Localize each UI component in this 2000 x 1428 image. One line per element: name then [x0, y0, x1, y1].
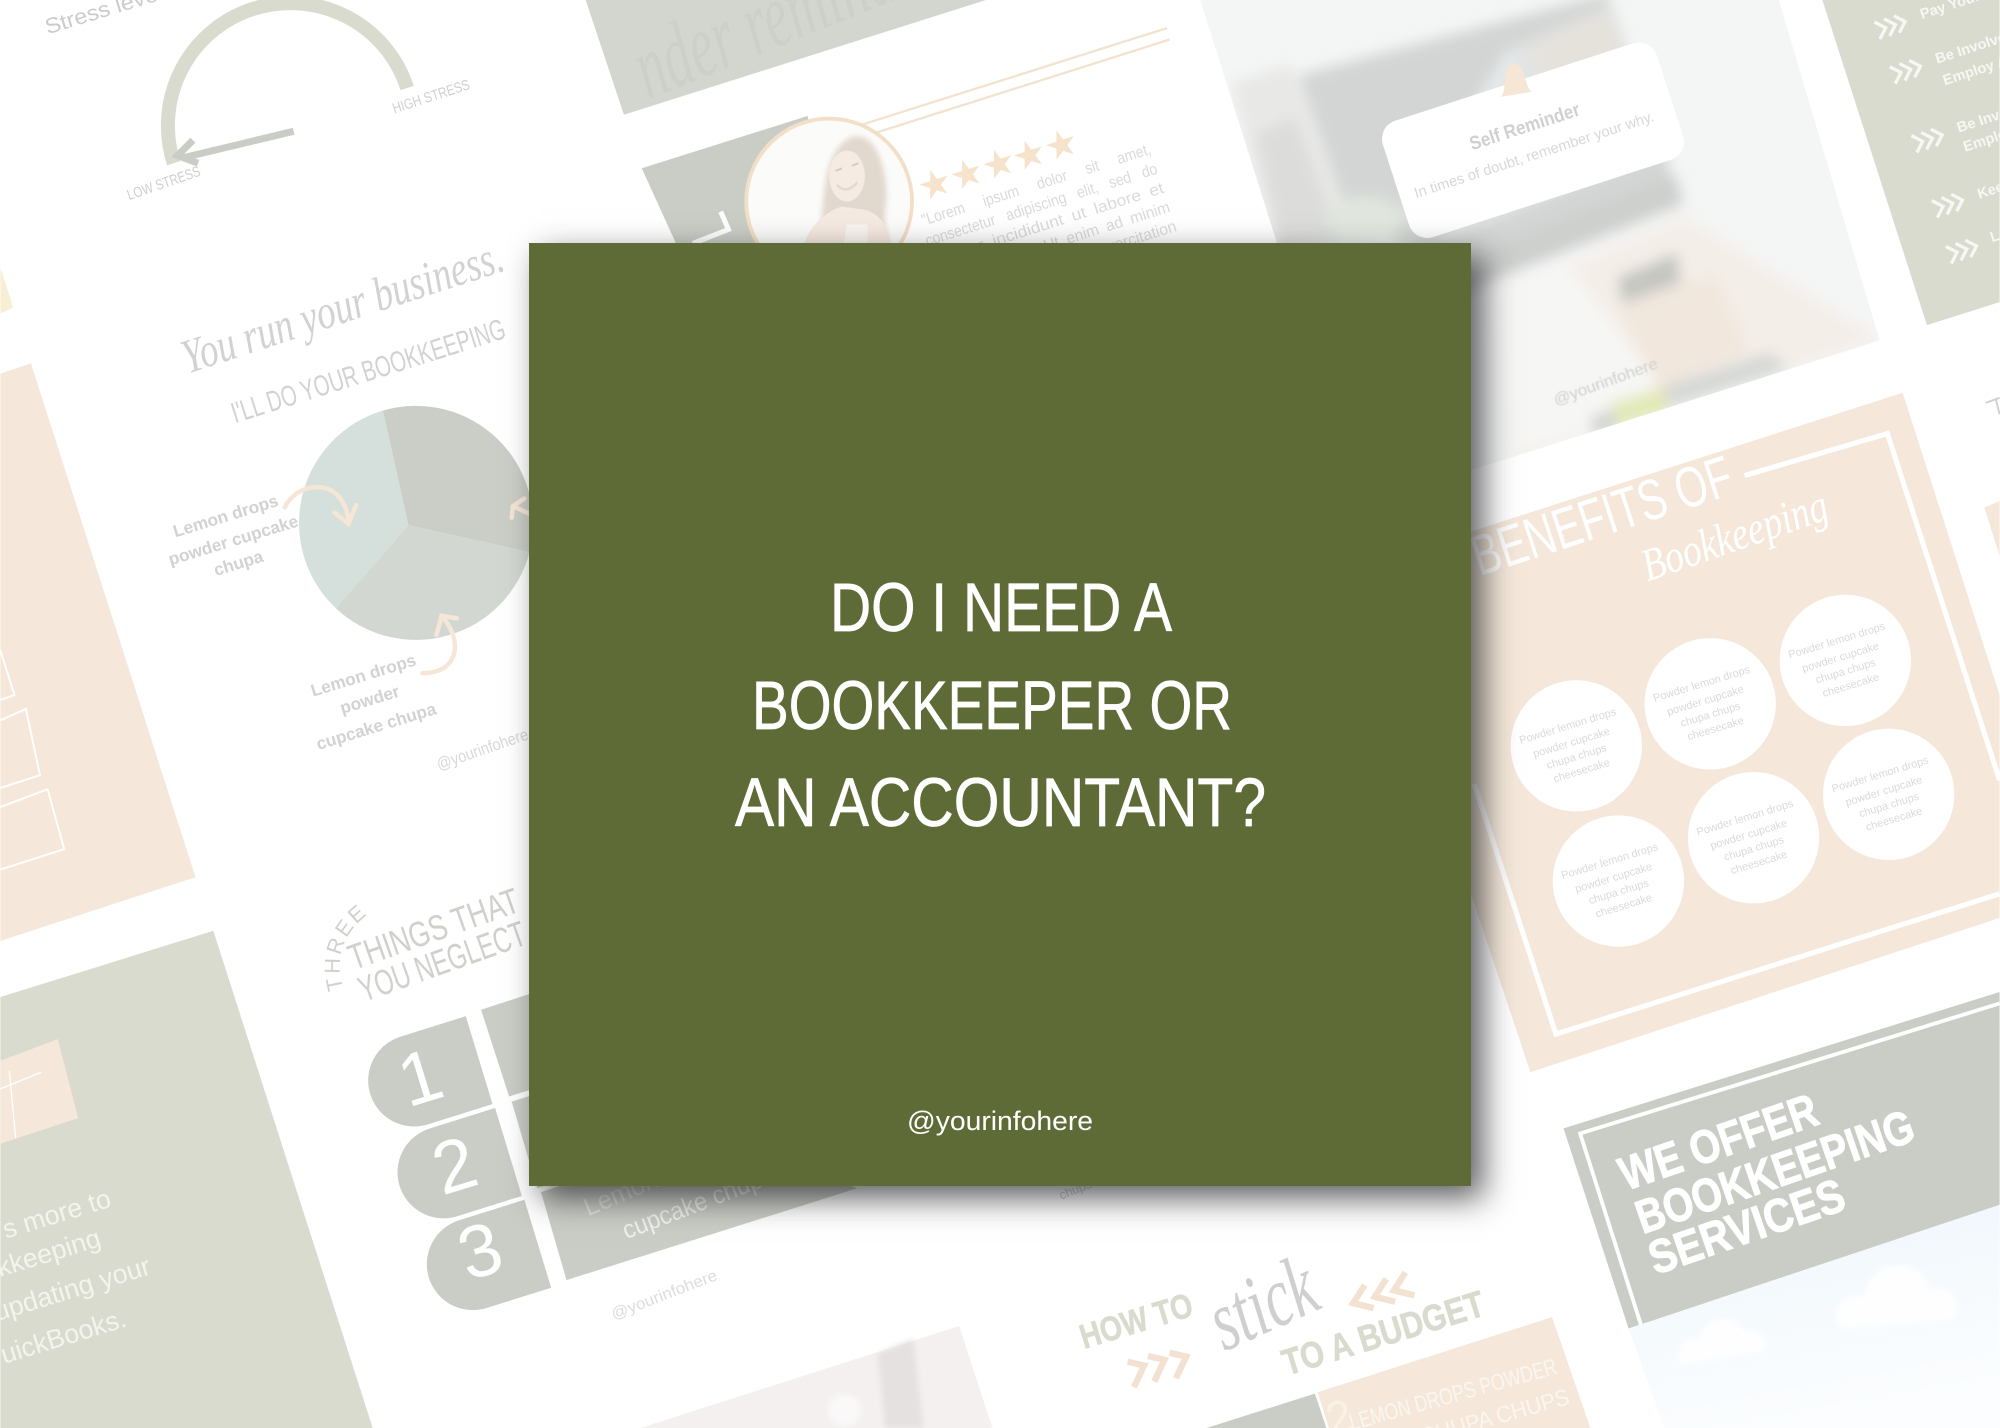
- testimonial text: tempor incididunt ut labore et: [930, 180, 1167, 269]
- label: high stress: HIGH STRESS: [391, 77, 472, 117]
- left grey object: [1236, 69, 1334, 198]
- pie chart: [299, 406, 533, 640]
- circle 6: cheesecake: [1864, 805, 1924, 834]
- card title: Self Reminder: [1467, 99, 1583, 155]
- keyboard: [1506, 274, 1651, 445]
- circle 5: powder cupcake: [1709, 817, 1789, 852]
- circle 5: cheesecake: [1729, 849, 1789, 877]
- heading: BOOKKEEPING: [1629, 1099, 1921, 1244]
- panel: peach template left: [0, 363, 195, 941]
- title: BOOKKEEPER OR: [752, 667, 1232, 744]
- portrait: [744, 116, 914, 243]
- label: left pie callout: Lemon drops: [171, 490, 281, 541]
- small text peeking below green card: chups: [1057, 1176, 1094, 1203]
- panel: stress gauge: [42, 0, 472, 204]
- circle 2: cheesecake: [1686, 715, 1745, 743]
- main green card: [529, 243, 1471, 1186]
- handle: @yourinfohere: [609, 1267, 720, 1323]
- banner: [586, 0, 986, 115]
- title: AN ACCOUNTANT?: [735, 764, 1266, 841]
- circle 5: Powder lemon drops: [1695, 798, 1795, 839]
- panel: you run your business: [166, 230, 533, 774]
- circle 3: chupa chups: [1814, 657, 1878, 686]
- content boxes: [1207, 1394, 1326, 1428]
- circle 1: chupa chups: [1545, 742, 1609, 772]
- quote text: s more to: [0, 1183, 114, 1245]
- stars: ★: [944, 149, 990, 200]
- panel: three things: [324, 881, 857, 1323]
- panel: we offer bookkeeping services: [1564, 992, 2000, 1428]
- handle: @yourinfohere: [434, 725, 531, 774]
- label: left pie callout: chupa: [211, 546, 266, 580]
- circle 6: Powder lemon drops: [1830, 754, 1930, 795]
- testimonial text: [920, 141, 1179, 307]
- arrow: bottom curved: [422, 616, 457, 673]
- testimonial text: consectetur adipiscing elit, sed do: [923, 161, 1160, 250]
- script heading: stick: [1193, 1237, 1332, 1369]
- icon: right chevrons: [1128, 1353, 1186, 1387]
- curved word three: [340, 912, 371, 989]
- stars: [912, 119, 1084, 210]
- circle 1: Powder lemon drops: [1518, 706, 1618, 747]
- panel: how to stick to a budget: [1075, 1237, 1590, 1428]
- sky photo: [1629, 1205, 2000, 1428]
- circle 4: chupa chups: [1587, 877, 1651, 907]
- circle 1: cheesecake: [1552, 757, 1612, 785]
- heading: how to: HOW TO: [1075, 1286, 1197, 1357]
- white frame: [1474, 434, 2000, 1034]
- desk: [1501, 217, 1880, 459]
- testimonial text: veniam, quis nostrud exercitation: [943, 218, 1179, 307]
- heading: BENEFITS OF: [1464, 444, 1740, 589]
- monitor body: [1298, 0, 1677, 274]
- panel: blurred desk photo: [1200, 0, 1880, 470]
- panel: three things: 1: [388, 1032, 452, 1123]
- circle 2: chupa chups: [1679, 700, 1743, 730]
- gauge needle arrow: [178, 131, 294, 163]
- label: bottom pie callout: Lemon drops: [308, 650, 418, 701]
- testimonial text: dolore magna. Ut enim ad minim: [936, 199, 1172, 288]
- panel: right edge slivers: [1984, 398, 2000, 556]
- panel: three things: THREE: [324, 904, 366, 992]
- title: DO I NEED A: [830, 569, 1172, 646]
- heading: [1612, 1083, 1921, 1284]
- circle 5: chupa chups: [1722, 834, 1786, 864]
- checklist text: [1918, 0, 2000, 246]
- plant: [1326, 196, 1403, 242]
- icon: chevrons: [1874, 13, 1979, 263]
- circle 3: powder cupcake: [1801, 640, 1881, 675]
- panel: testimonial: [586, 0, 1176, 243]
- circle 4: Powder lemon drops: [1560, 841, 1660, 882]
- text rows: [481, 950, 689, 1096]
- monitor light screen area: [1448, 45, 1542, 235]
- circle 2: powder cupcake: [1666, 684, 1745, 718]
- panel: three things: Lemon drops: [580, 1138, 728, 1222]
- stars: ★: [1038, 119, 1084, 171]
- label: bottom pie callout: powder: [337, 681, 402, 718]
- title: [735, 569, 1266, 841]
- circle 3: Powder lemon drops: [1787, 620, 1887, 661]
- testimonial text: "Lorem ipsum dolor sit amet,: [920, 141, 1153, 229]
- arrow: left curved: [285, 487, 356, 524]
- dark plant pot: [1617, 252, 1681, 303]
- label: left pie callout: [166, 490, 301, 580]
- script heading: You run your business.: [175, 230, 510, 384]
- label: bottom pie callout: cupcake chupa: [314, 698, 439, 754]
- circle 6: [1823, 729, 1954, 860]
- numbered pills: [368, 1016, 493, 1127]
- heading: WE OFFER: [1612, 1083, 1825, 1200]
- icon: bell: [1501, 64, 1532, 97]
- panel: three things: YOU NEGLECT: [353, 914, 531, 1010]
- handle: @yourinfohere: [1551, 356, 1660, 409]
- yellow note: [1611, 388, 1669, 428]
- circle 5: [1688, 772, 1819, 903]
- gauge arc: [168, 3, 407, 163]
- gray square: [642, 116, 842, 255]
- circle 2: Powder lemon drops: [1652, 664, 1752, 705]
- circle 4: cheesecake: [1594, 892, 1654, 920]
- stars: ★: [976, 138, 1022, 190]
- card text: In times of doubt, remember your why.: [1412, 109, 1656, 202]
- monitor lower bezel: [1471, 180, 1686, 290]
- circle 2: [1645, 638, 1776, 769]
- circle 1: powder cupcake: [1532, 726, 1611, 760]
- stars: ★: [1006, 129, 1052, 181]
- script heading: Bookkeeping: [1634, 480, 1834, 591]
- quote text: [0, 1183, 154, 1370]
- heading: bookkeeping: I'LL DO YOUR BOOKKEEPING: [227, 313, 509, 430]
- icon: large cloud: [1836, 1265, 1956, 1329]
- heading: THINGS THAT: [343, 881, 525, 978]
- label: left pie callout: powder cupcake: [166, 511, 301, 569]
- circle 4: [1553, 815, 1684, 947]
- heading: to a budget: TO A BUDGET: [1277, 1283, 1490, 1383]
- arrow: right: [512, 499, 532, 518]
- panel: three things: 3: [448, 1205, 512, 1296]
- circle 1: [1511, 680, 1642, 812]
- label: low stress: LOW STRESS: [125, 164, 203, 204]
- notification card: [1377, 38, 1689, 243]
- circle 4: powder cupcake: [1574, 861, 1654, 896]
- panel: sage checklist top right: [1822, 0, 2000, 325]
- circle 6: chupa chups: [1858, 791, 1921, 820]
- quote text: uickBooks.: [0, 1303, 130, 1370]
- peach lines: [861, 28, 1170, 133]
- icon: left chevrons: [1353, 1272, 1414, 1308]
- panel: blurred notebook photo bottom: [640, 1326, 992, 1428]
- icon: small cloud: [1679, 1319, 1765, 1364]
- circle 3: cheesecake: [1821, 671, 1881, 700]
- stars: ★: [912, 159, 958, 210]
- panel: three things: cupcake chupa: [619, 1161, 779, 1245]
- handle: @yourinfohere: [907, 1106, 1093, 1136]
- circle 6: powder cupcake: [1844, 774, 1924, 809]
- panel: yellow sliver: [0, 268, 13, 314]
- grey block: [1662, 352, 1788, 408]
- panel: sage quote bottom left: [0, 931, 373, 1428]
- panel: three things: 2: [423, 1119, 486, 1211]
- heading: SERVICES: [1641, 1168, 1851, 1284]
- peach tag: [0, 1039, 78, 1144]
- circle 3: [1780, 595, 1911, 726]
- panel: benefits of bookkeeping: [1464, 393, 2000, 1072]
- label: bottom pie callout: [308, 650, 439, 754]
